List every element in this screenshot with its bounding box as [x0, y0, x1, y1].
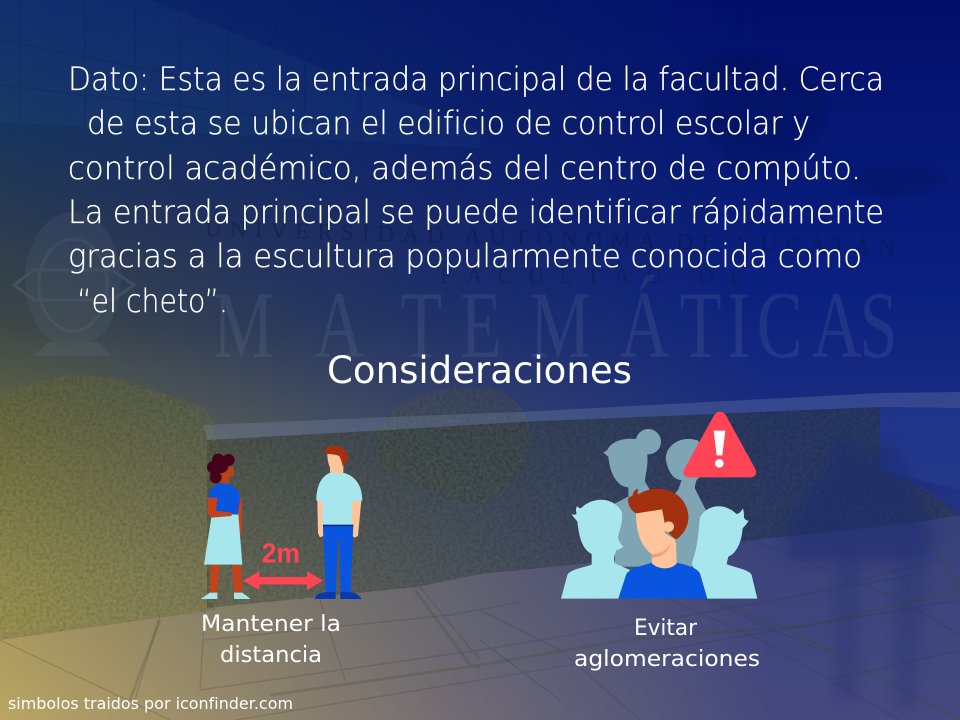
- background: garden grass: [207, 407, 960, 608]
- background: building with windows: [0, 0, 595, 148]
- background: left bush: [0, 375, 215, 640]
- icon: left silhouette: [561, 500, 630, 599]
- background: university seal: [14, 212, 134, 356]
- icon: warning triangle: [683, 412, 756, 477]
- background: paved walkway: [0, 515, 960, 720]
- icon: woman: [201, 454, 251, 599]
- icon: faded woman with bun: [603, 429, 665, 567]
- footer credit: simbolos traidos por iconfinder.com: [8, 694, 293, 713]
- icon: right silhouette: [692, 506, 757, 599]
- icon: faded person on right: [665, 439, 707, 567]
- main description text: La entrada principal se puede identificar rápidamente: [68, 193, 884, 231]
- icon: man: [315, 446, 362, 599]
- icon: two people keeping 2 m distance: [201, 446, 362, 599]
- label: Evitar aglomeraciones: Evitar: [634, 616, 698, 641]
- label: Mantener la distancia: distancia: [220, 643, 322, 668]
- background: people shadows on wall: [785, 439, 935, 710]
- heading: Consideraciones: Consideraciones: [327, 349, 632, 392]
- main description text: “el cheto”.: [77, 282, 228, 320]
- main description text: [68, 60, 884, 320]
- label: Mantener la distancia: Mantener la: [201, 612, 341, 637]
- main description text: de esta se ubican el edificio de control escolar y: [87, 104, 810, 142]
- background: center bush: [378, 387, 530, 505]
- arrow: double headed distance arrow: [243, 571, 323, 590]
- label: Evitar aglomeraciones: [574, 616, 760, 672]
- main description text: Dato: Esta es la entrada principal de la facultad. Cerca: [68, 60, 884, 98]
- background: engraved university name: UNIVERSIDAD AUTÓNOMA DE YUCATÁN: [205, 215, 896, 260]
- icon: crowd with warning sign: [561, 412, 757, 599]
- label: 2m: 2m: [262, 538, 300, 569]
- background: engraved words Facultad de: FACULTAD DE: [440, 263, 743, 288]
- label: Mantener la distancia: [201, 612, 341, 668]
- main description text: gracias a la escultura popularmente conocida como: [68, 237, 862, 275]
- icon: foreground man: [618, 489, 707, 599]
- label: Evitar aglomeraciones: aglomeraciones: [574, 647, 760, 672]
- background: engraved word Matemáticas: MATEMÁTICAS: [213, 272, 898, 378]
- background: wall cap and side wall: [203, 392, 960, 490]
- main description text: control académico, además del centro de compúto.: [68, 149, 861, 187]
- background: dark trees behind building: [695, 54, 945, 195]
